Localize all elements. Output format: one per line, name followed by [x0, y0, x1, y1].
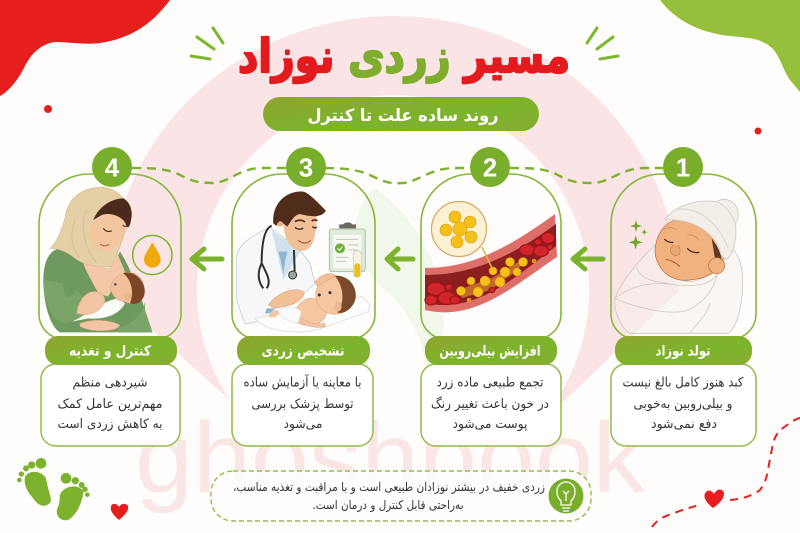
title rays left	[191, 28, 223, 59]
card frame 4	[39, 174, 181, 339]
watermark	[109, 16, 679, 514]
description box 3: توسط پزشک بررسی	[252, 397, 354, 412]
illustration: swaddled baby	[615, 199, 743, 333]
description box 2: تجمع طبیعی ماده زرد	[436, 376, 544, 390]
arrow 3 to 4	[192, 249, 222, 269]
description box 4: به کاهش زردی است	[58, 417, 162, 432]
tip text: به‌راحتی قابل کنترل و درمان است.	[312, 498, 464, 513]
panel: step 2	[421, 147, 561, 446]
description box 1: و بیلی‌روبین به‌خوبی	[634, 397, 732, 412]
illustration: doctor with baby	[237, 192, 370, 332]
tip box	[211, 471, 591, 521]
title rays right	[587, 28, 618, 59]
dashed connector	[132, 168, 663, 183]
badge 2	[470, 147, 510, 187]
label 1: تولد نوزاد	[656, 344, 710, 360]
illustration: blood vessel with bilirubin	[425, 202, 557, 312]
description box 3: با معاینه یا آزمایش ساده	[244, 374, 362, 390]
red dashed path	[652, 418, 800, 527]
red corner blob	[0, 0, 170, 96]
subtitle pill: روند ساده علت تا کنترل	[308, 106, 498, 126]
card frame 1	[611, 174, 756, 339]
arrow 1 to 2	[573, 249, 603, 269]
red dot right	[754, 128, 762, 134]
card frame 3	[232, 174, 375, 339]
panel: step 4	[39, 147, 181, 446]
label 4: کنترل و تغذیه	[69, 344, 152, 360]
description box 1: کبد هنوز کامل بالغ نیست	[622, 376, 744, 390]
description box 1	[611, 364, 756, 446]
badge 3	[286, 147, 326, 187]
badge 4	[92, 147, 132, 187]
subtitle pill	[263, 97, 539, 131]
description box 1: دفع نمی‌شود	[651, 417, 717, 432]
illustration: mother breastfeeding	[43, 187, 172, 332]
description box 2	[421, 364, 561, 446]
panel: step 3	[232, 147, 375, 446]
label 2	[425, 336, 557, 365]
footprints	[17, 458, 90, 520]
badge 3: 3	[299, 152, 313, 182]
badge 1: 1	[676, 152, 690, 182]
card frame 2	[421, 174, 561, 339]
icon: light bulb	[548, 478, 584, 514]
panel: step 1	[611, 147, 756, 446]
label 3	[237, 336, 370, 365]
label 4	[45, 336, 177, 365]
badge 2: 2	[483, 152, 497, 182]
title: مسیر زردی نوزاد	[238, 29, 570, 83]
badge 1	[663, 147, 703, 187]
description box 4	[41, 364, 180, 446]
watermark: ghoshpook	[135, 402, 646, 514]
heart left	[111, 504, 128, 520]
description box 4: مهم‌ترین عامل کمک	[58, 397, 162, 412]
badge 4: 4	[105, 152, 120, 182]
description box 3: می‌شود	[284, 417, 322, 432]
green corner blob	[660, 0, 800, 92]
label 2: افزایش بیلی‌روبین	[440, 344, 540, 360]
red dot left	[44, 105, 52, 113]
tip text	[233, 480, 545, 513]
description box 4: شیردهی منظم	[72, 376, 148, 390]
description box 2: پوست می‌شود	[452, 417, 528, 432]
arrow 2 to 3	[387, 249, 413, 269]
heart right	[704, 490, 724, 508]
label 3: تشخیص زردی	[262, 344, 344, 360]
tip text: زردی خفیف در بیشتر نوزادان طبیعی است و با مراقبت و تغذیه مناسب،	[233, 480, 545, 495]
label 1	[615, 336, 752, 365]
description box 2: در خون باعث تغییر رنگ	[431, 396, 549, 412]
description box 3	[232, 364, 373, 446]
